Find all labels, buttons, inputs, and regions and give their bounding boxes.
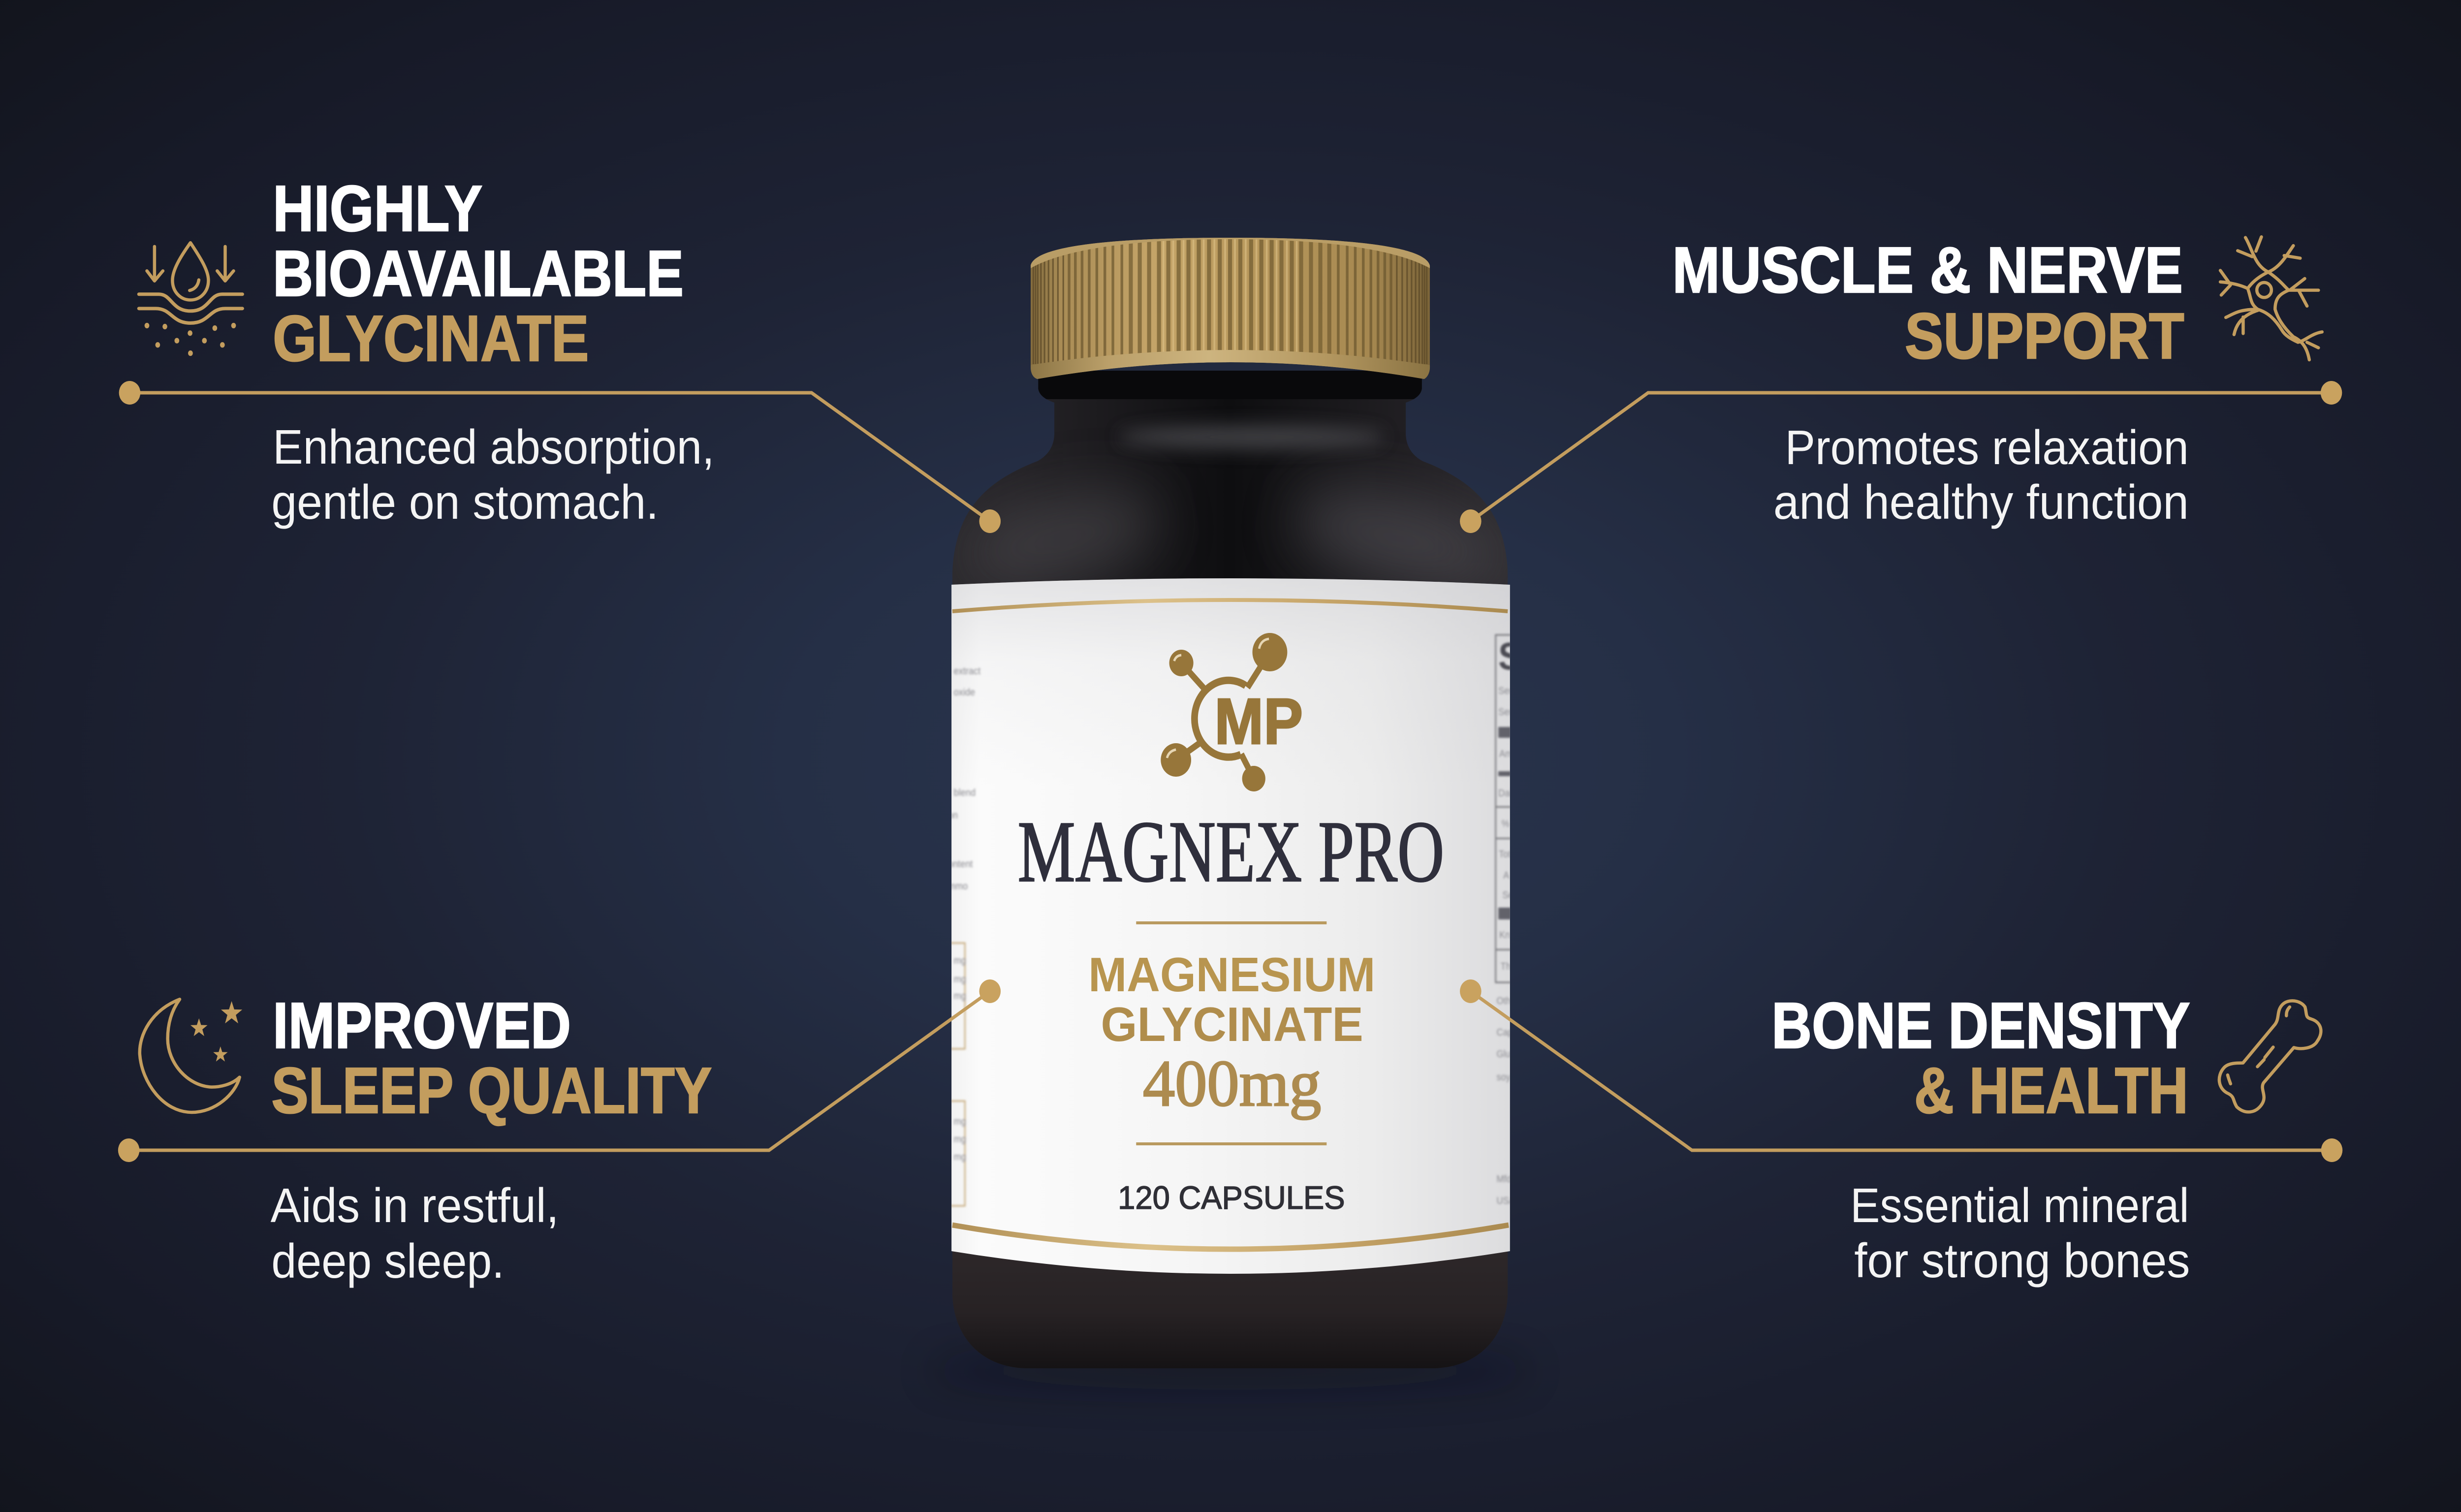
label rule upper: [1136, 921, 1326, 924]
heading: [1672, 234, 2184, 372]
icon: neuron: [2220, 237, 2322, 360]
bottle label: [951, 578, 1510, 1274]
fine print left: mg: [954, 1152, 966, 1163]
logo: MP molecule: MP: [1214, 685, 1303, 757]
body text: [1850, 1178, 2190, 1288]
supplement facts panel: %: [1502, 819, 1510, 829]
supplement facts panel: USA: [1497, 1196, 1515, 1206]
product name: GLYCINATE: [1101, 997, 1363, 1051]
fine print left: mmo: [948, 881, 968, 892]
body text: for strong bones: [1854, 1233, 2190, 1288]
heading: SUPPORT: [1905, 300, 2184, 372]
heading: BONE DENSITY: [1771, 989, 2190, 1062]
capsule count: 120 CAPSULES: [1118, 1180, 1345, 1216]
supplement facts panel: Serving: [1498, 686, 1529, 696]
heading: BIOAVAILABLE: [273, 237, 684, 310]
fine print left: mg: [954, 955, 966, 966]
body text: [1773, 420, 2189, 529]
supplement facts panel: Daily: [1498, 788, 1518, 799]
body text: Essential mineral: [1850, 1178, 2189, 1232]
label bottom gold rule: [952, 1225, 1509, 1249]
bottle body: [939, 364, 1520, 1378]
dosage: 400mg: [1143, 1047, 1321, 1120]
supplement facts panel: Glut: [1497, 1049, 1513, 1060]
heading: [271, 989, 712, 1127]
product name: MAGNESIUM: [1088, 947, 1375, 1002]
connector line: [118, 979, 1001, 1162]
supplement facts panel: Total: [1499, 849, 1517, 860]
fine print left: [951, 667, 981, 1208]
fine print left: oxide: [954, 687, 975, 698]
body text: [271, 420, 715, 529]
icon: absorption drop: [139, 243, 242, 356]
supplement facts panel: [1493, 633, 1510, 1205]
connector line: [1460, 979, 2342, 1162]
body text: gentle on stomach.: [271, 475, 659, 529]
heading: [1771, 989, 2190, 1127]
heading: GLYCINATE: [273, 302, 589, 375]
fine print left: mg: [954, 991, 966, 1002]
body text: and healthy function: [1773, 475, 2189, 529]
supplement facts panel: Servings: [1498, 707, 1533, 718]
label top gold rule: [952, 600, 1508, 611]
callout: bone density and health: [1460, 979, 2342, 1288]
icon: bone: [2219, 1001, 2321, 1112]
callout: muscle and nerve support: [1460, 234, 2342, 533]
bottle cap: [1028, 236, 1431, 384]
bottle: [939, 236, 1585, 1378]
body text: [271, 1178, 559, 1288]
heading: MUSCLE & NERVE: [1672, 234, 2183, 306]
product name: [1088, 947, 1375, 1051]
heading: HIGHLY: [273, 172, 482, 245]
supplement facts panel: Caps: [1497, 1027, 1517, 1038]
heading: [273, 172, 684, 375]
brand name: MAGNEX PRO: [1018, 803, 1444, 900]
supplement facts panel: Mfd: [1497, 1174, 1512, 1185]
heading: IMPROVED: [273, 989, 571, 1062]
callout: highly bioavailable glycinate: [119, 172, 1001, 533]
body text: Promotes relaxation: [1785, 420, 2189, 474]
supplement facts panel: Th: [1501, 961, 1511, 972]
fine print left: mg: [954, 1116, 966, 1127]
supplement facts panel: Kn: [1499, 930, 1510, 941]
heading: SLEEP QUALITY: [271, 1054, 712, 1127]
fine print left: extract: [954, 666, 981, 677]
connector line: [1460, 381, 2342, 533]
supplement facts panel: soy: [1497, 1072, 1511, 1083]
connector line: [119, 381, 1001, 533]
body text: Aids in restful,: [271, 1178, 559, 1232]
fine print left: ontent: [948, 859, 973, 870]
icon: moon and stars: [140, 999, 242, 1112]
fine print left: mg: [954, 974, 966, 985]
supplement facts panel: Supp: [1498, 635, 1585, 678]
fine print left: blend: [954, 788, 976, 798]
label rule lower: [1136, 1142, 1326, 1145]
supplement facts panel: Amt: [1499, 749, 1515, 759]
heading: & HEALTH: [1914, 1054, 2188, 1127]
fine print left: on: [948, 810, 958, 821]
supplement facts panel: Other: [1497, 996, 1519, 1007]
callout: improved sleep quality: [118, 979, 1001, 1288]
fine print left: mg: [954, 1134, 966, 1145]
bottle shadow: [926, 1351, 1534, 1390]
supplement facts panel: Se: [1502, 890, 1514, 901]
body text: deep sleep.: [271, 1234, 505, 1288]
logo: MP molecule: [1161, 633, 1303, 791]
supplement facts panel: A: [1503, 870, 1510, 881]
body text: Enhanced absorption,: [273, 420, 715, 474]
